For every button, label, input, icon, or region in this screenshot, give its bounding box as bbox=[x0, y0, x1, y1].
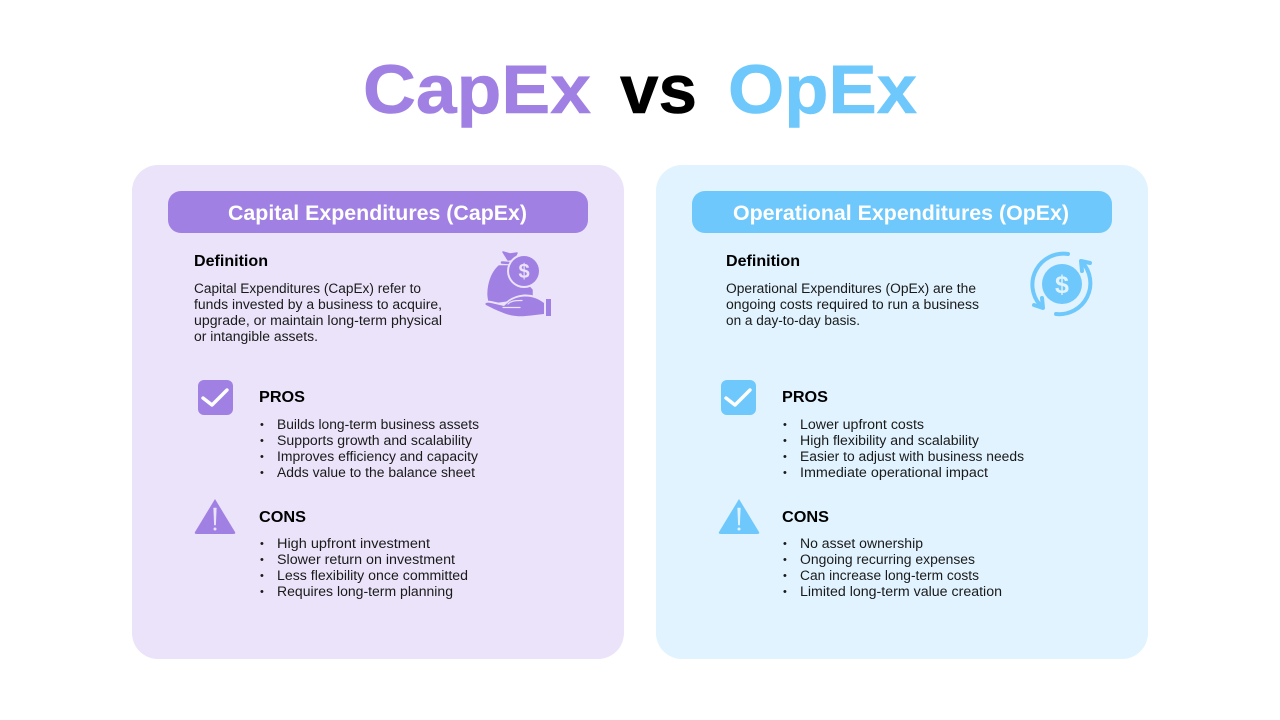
opex pros: • bbox=[783, 435, 787, 447]
capex pros: Improves efficiency and capacity bbox=[277, 449, 478, 464]
opex cons bbox=[719, 499, 1002, 599]
opex definition: ongoing costs required to run a business bbox=[726, 297, 979, 312]
opex pros: • bbox=[783, 419, 787, 431]
icon: warning triangle bbox=[719, 499, 759, 534]
capex pros: • bbox=[260, 467, 264, 479]
capex definition: or intangible assets. bbox=[194, 329, 318, 344]
opex header bar bbox=[692, 191, 1112, 233]
capex cons: CONS bbox=[259, 509, 306, 526]
opex pros: • bbox=[783, 467, 787, 479]
icon: recurring dollar bbox=[1032, 254, 1090, 314]
capex cons: • bbox=[260, 554, 264, 566]
opex pros: Lower upfront costs bbox=[800, 417, 924, 432]
title: OpEx bbox=[728, 51, 917, 128]
capex cons: Requires long-term planning bbox=[277, 584, 453, 599]
opex pros: PROS bbox=[782, 389, 828, 406]
opex definition: Definition bbox=[726, 253, 800, 270]
opex cons: • bbox=[783, 586, 787, 598]
capex pros: Adds value to the balance sheet bbox=[277, 465, 475, 480]
capex header bar: Capital Expenditures (CapEx) bbox=[228, 201, 527, 225]
capex definition bbox=[194, 253, 442, 344]
capex pros bbox=[198, 380, 479, 480]
capex header bar bbox=[168, 191, 588, 233]
opex definition bbox=[726, 253, 979, 328]
icon: recurring dollar: $ bbox=[1055, 271, 1069, 299]
opex pros: • bbox=[783, 451, 787, 463]
icon: check box bbox=[198, 380, 233, 415]
capex definition: upgrade, or maintain long-term physical bbox=[194, 313, 442, 328]
icon: money bag on hand bbox=[485, 252, 551, 317]
icon: warning triangle bbox=[195, 499, 235, 534]
capex pros: • bbox=[260, 435, 264, 447]
opex cons: Can increase long-term costs bbox=[800, 568, 979, 583]
opex header bar: Operational Expenditures (OpEx) bbox=[733, 201, 1069, 225]
opex pros bbox=[721, 380, 1024, 480]
opex cons: No asset ownership bbox=[800, 536, 923, 551]
opex definition: Operational Expenditures (OpEx) are the bbox=[726, 281, 976, 296]
capex cons: Slower return on investment bbox=[277, 552, 455, 567]
capex cons: • bbox=[260, 538, 264, 550]
capex cons bbox=[195, 499, 468, 599]
opex cons: • bbox=[783, 538, 787, 550]
icon: money bag on hand: $ bbox=[518, 261, 530, 283]
capex cons: Less flexibility once committed bbox=[277, 568, 468, 583]
capex pros: Builds long-term business assets bbox=[277, 417, 479, 432]
capex definition: Definition bbox=[194, 253, 268, 270]
capex definition: funds invested by a business to acquire, bbox=[194, 297, 442, 312]
opex cons: Ongoing recurring expenses bbox=[800, 552, 975, 567]
capex definition: Capital Expenditures (CapEx) refer to bbox=[194, 281, 421, 296]
opex cons: Limited long-term value creation bbox=[800, 584, 1002, 599]
capex cons: • bbox=[260, 570, 264, 582]
icon: check box bbox=[721, 380, 756, 415]
title bbox=[363, 51, 917, 128]
capex pros: • bbox=[260, 451, 264, 463]
capex cons: High upfront investment bbox=[277, 536, 430, 551]
capex pros: Supports growth and scalability bbox=[277, 433, 472, 448]
opex pros: Immediate operational impact bbox=[800, 465, 988, 480]
opex definition: on a day-to-day basis. bbox=[726, 313, 860, 328]
opex pros: High flexibility and scalability bbox=[800, 433, 979, 448]
opex cons: CONS bbox=[782, 509, 829, 526]
title: CapEx bbox=[363, 51, 591, 128]
capex pros: PROS bbox=[259, 389, 305, 406]
opex cons: • bbox=[783, 554, 787, 566]
capex cons: • bbox=[260, 586, 264, 598]
opex cons: • bbox=[783, 570, 787, 582]
panel: opex bbox=[656, 165, 1148, 659]
title: vs bbox=[620, 51, 697, 128]
opex pros: Easier to adjust with business needs bbox=[800, 449, 1024, 464]
panel: capex bbox=[132, 165, 624, 659]
capex pros: • bbox=[260, 419, 264, 431]
